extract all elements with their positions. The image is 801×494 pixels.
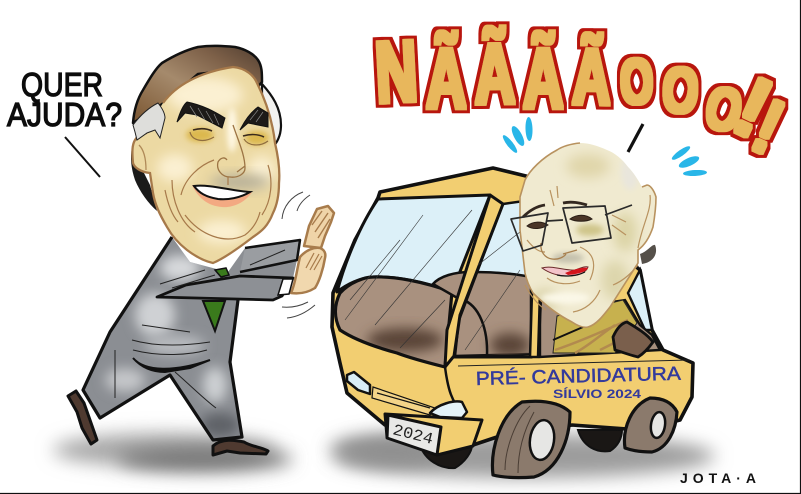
title: N <box>373 22 420 122</box>
title: O <box>660 54 701 127</box>
door frame <box>452 203 541 357</box>
ground shadow <box>53 433 715 478</box>
shirt <box>553 300 637 353</box>
facial lines <box>525 186 650 312</box>
eyebrows <box>177 102 268 130</box>
eyes <box>527 215 592 229</box>
nose <box>218 125 245 177</box>
grey side hair <box>133 103 165 140</box>
signature: JOTA·A <box>680 470 756 486</box>
arm lines <box>555 320 630 353</box>
car lettering <box>476 364 681 401</box>
motion lines <box>282 192 315 318</box>
number plate <box>387 415 441 455</box>
title: O <box>619 46 654 118</box>
door crease <box>458 360 690 366</box>
number plate: 2024 <box>391 421 435 449</box>
suit <box>83 237 300 440</box>
shirt collar line <box>553 327 583 340</box>
front crease <box>445 367 462 412</box>
speech tick left <box>65 137 100 177</box>
grille <box>372 387 435 415</box>
rear tyres <box>420 430 622 468</box>
rear wheel <box>624 398 677 452</box>
man pushing <box>68 46 334 455</box>
front wheel <box>492 401 570 478</box>
left headlight <box>347 372 370 394</box>
dashboard seat <box>336 277 452 367</box>
old man <box>511 143 656 357</box>
tie <box>203 268 229 331</box>
bumper <box>385 414 482 455</box>
sweat drops left <box>501 117 533 155</box>
speech text: quer ajuda: AJUDA? <box>7 96 122 133</box>
windscreen <box>337 195 490 292</box>
title: ! <box>720 59 786 157</box>
interior panel <box>540 292 660 357</box>
closed eyes <box>190 129 268 145</box>
front shoe <box>213 440 268 455</box>
title <box>373 22 796 171</box>
speech text: quer ajuda <box>7 66 122 133</box>
title: Ã <box>426 31 467 127</box>
side window <box>470 201 527 277</box>
brows <box>523 202 587 217</box>
nose <box>541 243 577 259</box>
smile lines <box>165 160 271 239</box>
sweat drops right <box>670 144 707 177</box>
car lettering: PRÉ- CANDIDATURA <box>476 364 681 390</box>
mouth <box>542 267 588 276</box>
upper hand <box>304 206 334 248</box>
suit folds <box>115 250 285 408</box>
title: O <box>699 73 748 147</box>
title: Ã <box>572 32 611 122</box>
door seat <box>433 272 531 357</box>
title: ! <box>741 82 796 171</box>
car <box>332 168 693 478</box>
side hair right <box>262 84 281 148</box>
car body <box>332 168 693 447</box>
back shoe <box>68 391 97 444</box>
speech tick right <box>628 124 643 152</box>
title: Ã <box>523 31 564 127</box>
car lettering: SÍLVIO 2024 <box>553 386 641 401</box>
rear window <box>628 270 652 330</box>
hair <box>133 46 262 123</box>
window reflections <box>345 210 520 350</box>
lower hand <box>291 248 325 293</box>
cuff <box>278 279 293 295</box>
glasses <box>511 205 632 251</box>
head <box>520 143 656 327</box>
b-pillar <box>530 292 540 357</box>
right headlight <box>430 401 467 418</box>
ear <box>139 145 146 170</box>
back hair <box>640 245 656 264</box>
arm rest <box>613 322 653 357</box>
dark hair back <box>131 147 157 211</box>
pillar <box>445 195 503 367</box>
face <box>132 67 279 263</box>
mouth <box>192 185 252 207</box>
speech text: quer ajuda: QUER <box>21 66 103 103</box>
title: Ã <box>474 26 516 123</box>
